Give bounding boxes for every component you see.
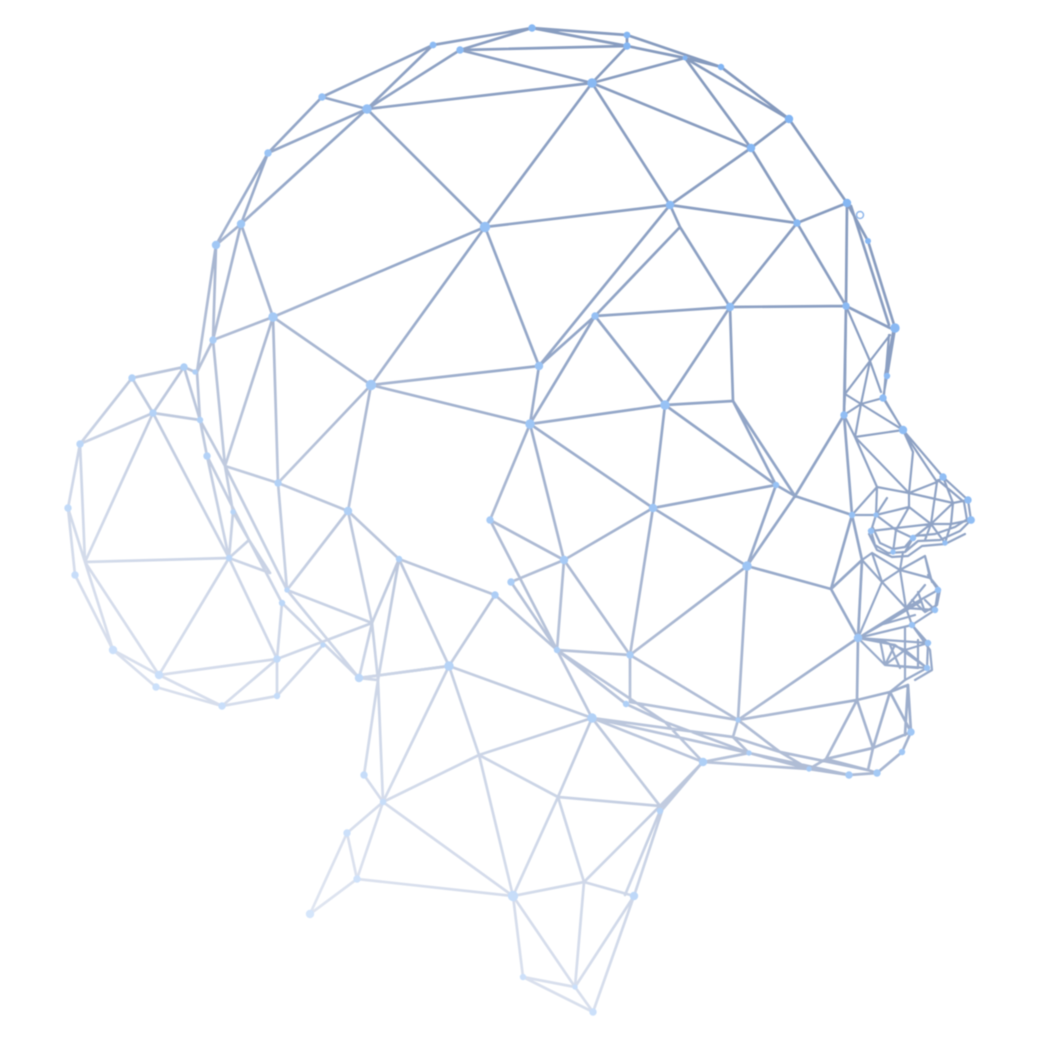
neck mesh	[310, 511, 703, 1012]
skull mesh	[197, 28, 895, 424]
back of head mesh	[197, 317, 449, 680]
ear bun mesh	[68, 367, 372, 706]
face mesh	[490, 306, 971, 810]
